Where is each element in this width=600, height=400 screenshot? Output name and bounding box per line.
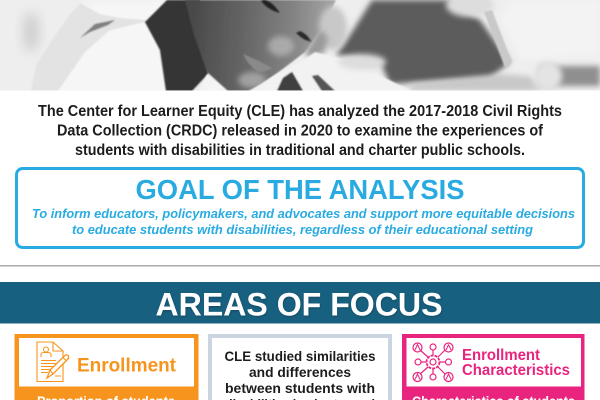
goal description: to educate students with disabilities, regardless of their educational setting [72,222,533,237]
panel: goal of the analysis [16,168,584,248]
intro text block [38,103,562,159]
intro text block: students with disabilities in traditional and charter public schools. [75,142,525,159]
heading: goal of the analysis: GOAL OF THE ANALYSIS [136,174,464,205]
photo: student writing at desk [0,0,600,91]
goal description: To inform educators, policymakers, and advocates and support more equitable decisions [32,206,575,221]
study description text: CLE studied similarities [224,348,376,364]
icon: document and pencil [37,342,69,382]
study description text [224,348,376,400]
label: enrollment characteristics: Characteristics [462,362,570,379]
icon: network of students [413,343,453,382]
intro text block: Data Collection (CRDC) released in 2020 to examine the experiences of [57,122,544,140]
label: enrollment characteristics: Enrollment [462,347,541,364]
panel: study description [210,336,390,400]
label: enrollment: Enrollment [77,356,177,376]
label: enrollment characteristics [462,347,570,379]
banner: areas of focus: AREAS OF FOCUS [156,286,442,322]
banner: areas of focus [0,282,600,324]
panel: enrollment characteristics [402,334,584,400]
study description text: and differences [249,364,351,380]
intro text block: The Center for Learner Equity (CLE) has analyzed the 2017-2018 Civil Rights [38,103,562,120]
study description text: between students with [225,380,375,396]
goal description [32,206,575,237]
panel: enrollment [14,334,198,400]
